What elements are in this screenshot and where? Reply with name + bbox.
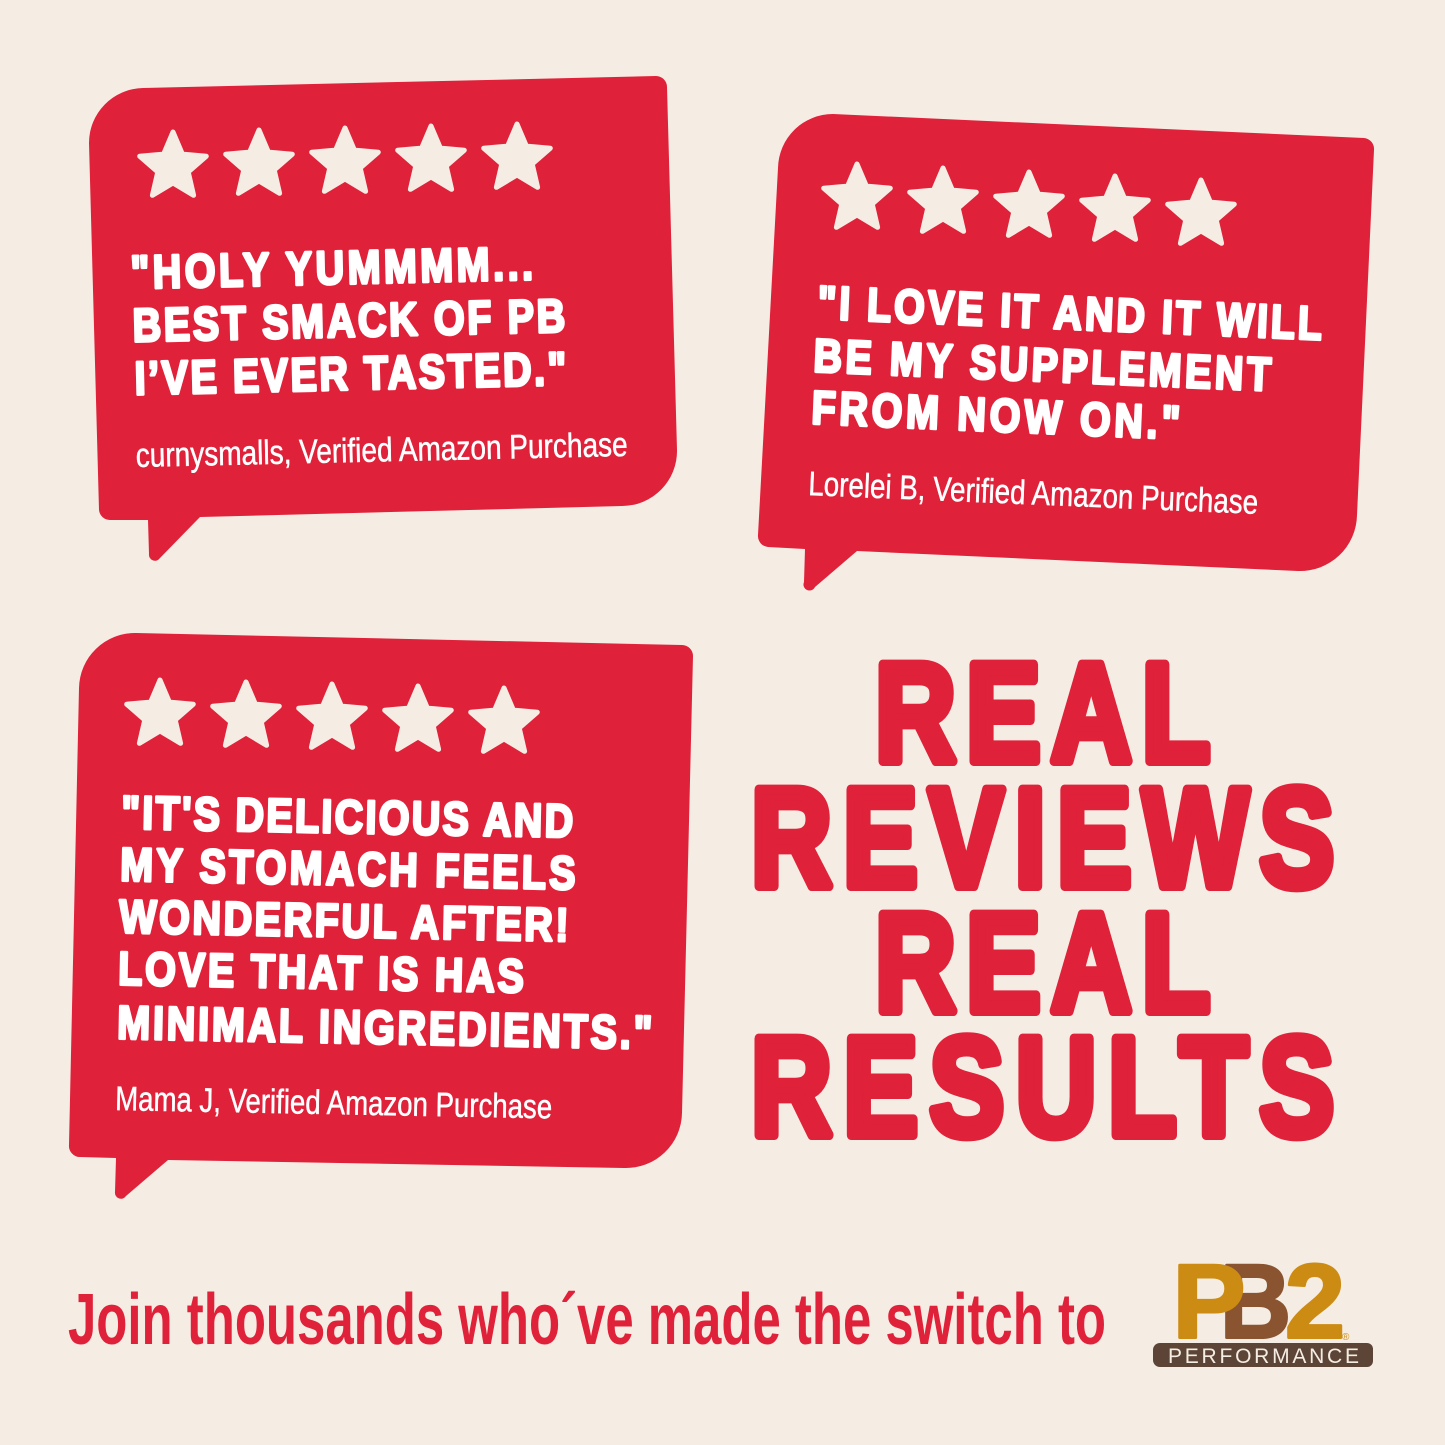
logo bar <box>1153 1343 1373 1367</box>
panel: review bubble 1 <box>89 76 677 561</box>
registered mark: ® <box>1342 1332 1350 1343</box>
heading: real reviews real results: REAL <box>875 884 1210 1041</box>
quote 3: MY STOMACH FEELS <box>120 839 576 900</box>
quote 3: "IT'S DELICIOUS AND <box>121 787 574 848</box>
heading: real reviews real results: RESULTS <box>751 1008 1334 1165</box>
attribution 3: Mama J, Verified Amazon Purchase <box>115 1080 552 1126</box>
logo digit 2: 2 <box>1285 1244 1345 1360</box>
logo: PB2 Performance <box>1153 1244 1373 1368</box>
heading: real reviews real results: REVIEWS <box>751 759 1334 916</box>
heading: real reviews real results: REAL <box>875 634 1210 791</box>
speech bubble shape 1 <box>89 76 677 561</box>
quote 3: WONDERFUL AFTER! <box>119 891 569 952</box>
five stars rating 3 <box>127 680 537 751</box>
quote 1: I’VE EVER TASTED." <box>134 344 567 405</box>
attribution 2: Lorelei B, Verified Amazon Purchase <box>808 465 1259 522</box>
logo letter B: B <box>1220 1244 1291 1360</box>
five stars rating 2 <box>824 164 1234 243</box>
speech bubble shape 3 <box>69 633 693 1199</box>
speech bubble shape 2 <box>758 114 1374 591</box>
quote 2 <box>811 277 1323 450</box>
quote 1: "HOLY YUMMMM... <box>130 238 534 299</box>
quote 3 <box>117 787 653 1060</box>
panel: review bubble 3 <box>69 633 693 1199</box>
five stars rating 1 <box>140 124 550 195</box>
quote 1 <box>130 238 567 405</box>
heading: real reviews real results <box>751 634 1334 1165</box>
quote 2: FROM NOW ON." <box>811 382 1181 450</box>
quote 3: LOVE THAT IS HAS <box>118 943 524 1003</box>
quote 3: MINIMAL INGREDIENTS." <box>117 997 653 1060</box>
quote 2: BE MY SUPPLEMENT <box>813 330 1273 402</box>
logo word performance: PERFORMANCE <box>1168 1345 1359 1368</box>
logo letter P: P <box>1172 1244 1246 1360</box>
quote 2: "I LOVE IT AND IT WILL <box>817 277 1323 350</box>
quote 1: BEST SMACK OF PB <box>132 291 566 352</box>
panel: review bubble 2 <box>758 114 1374 591</box>
attribution 1: curnysmalls, Verified Amazon Purchase <box>135 426 628 475</box>
